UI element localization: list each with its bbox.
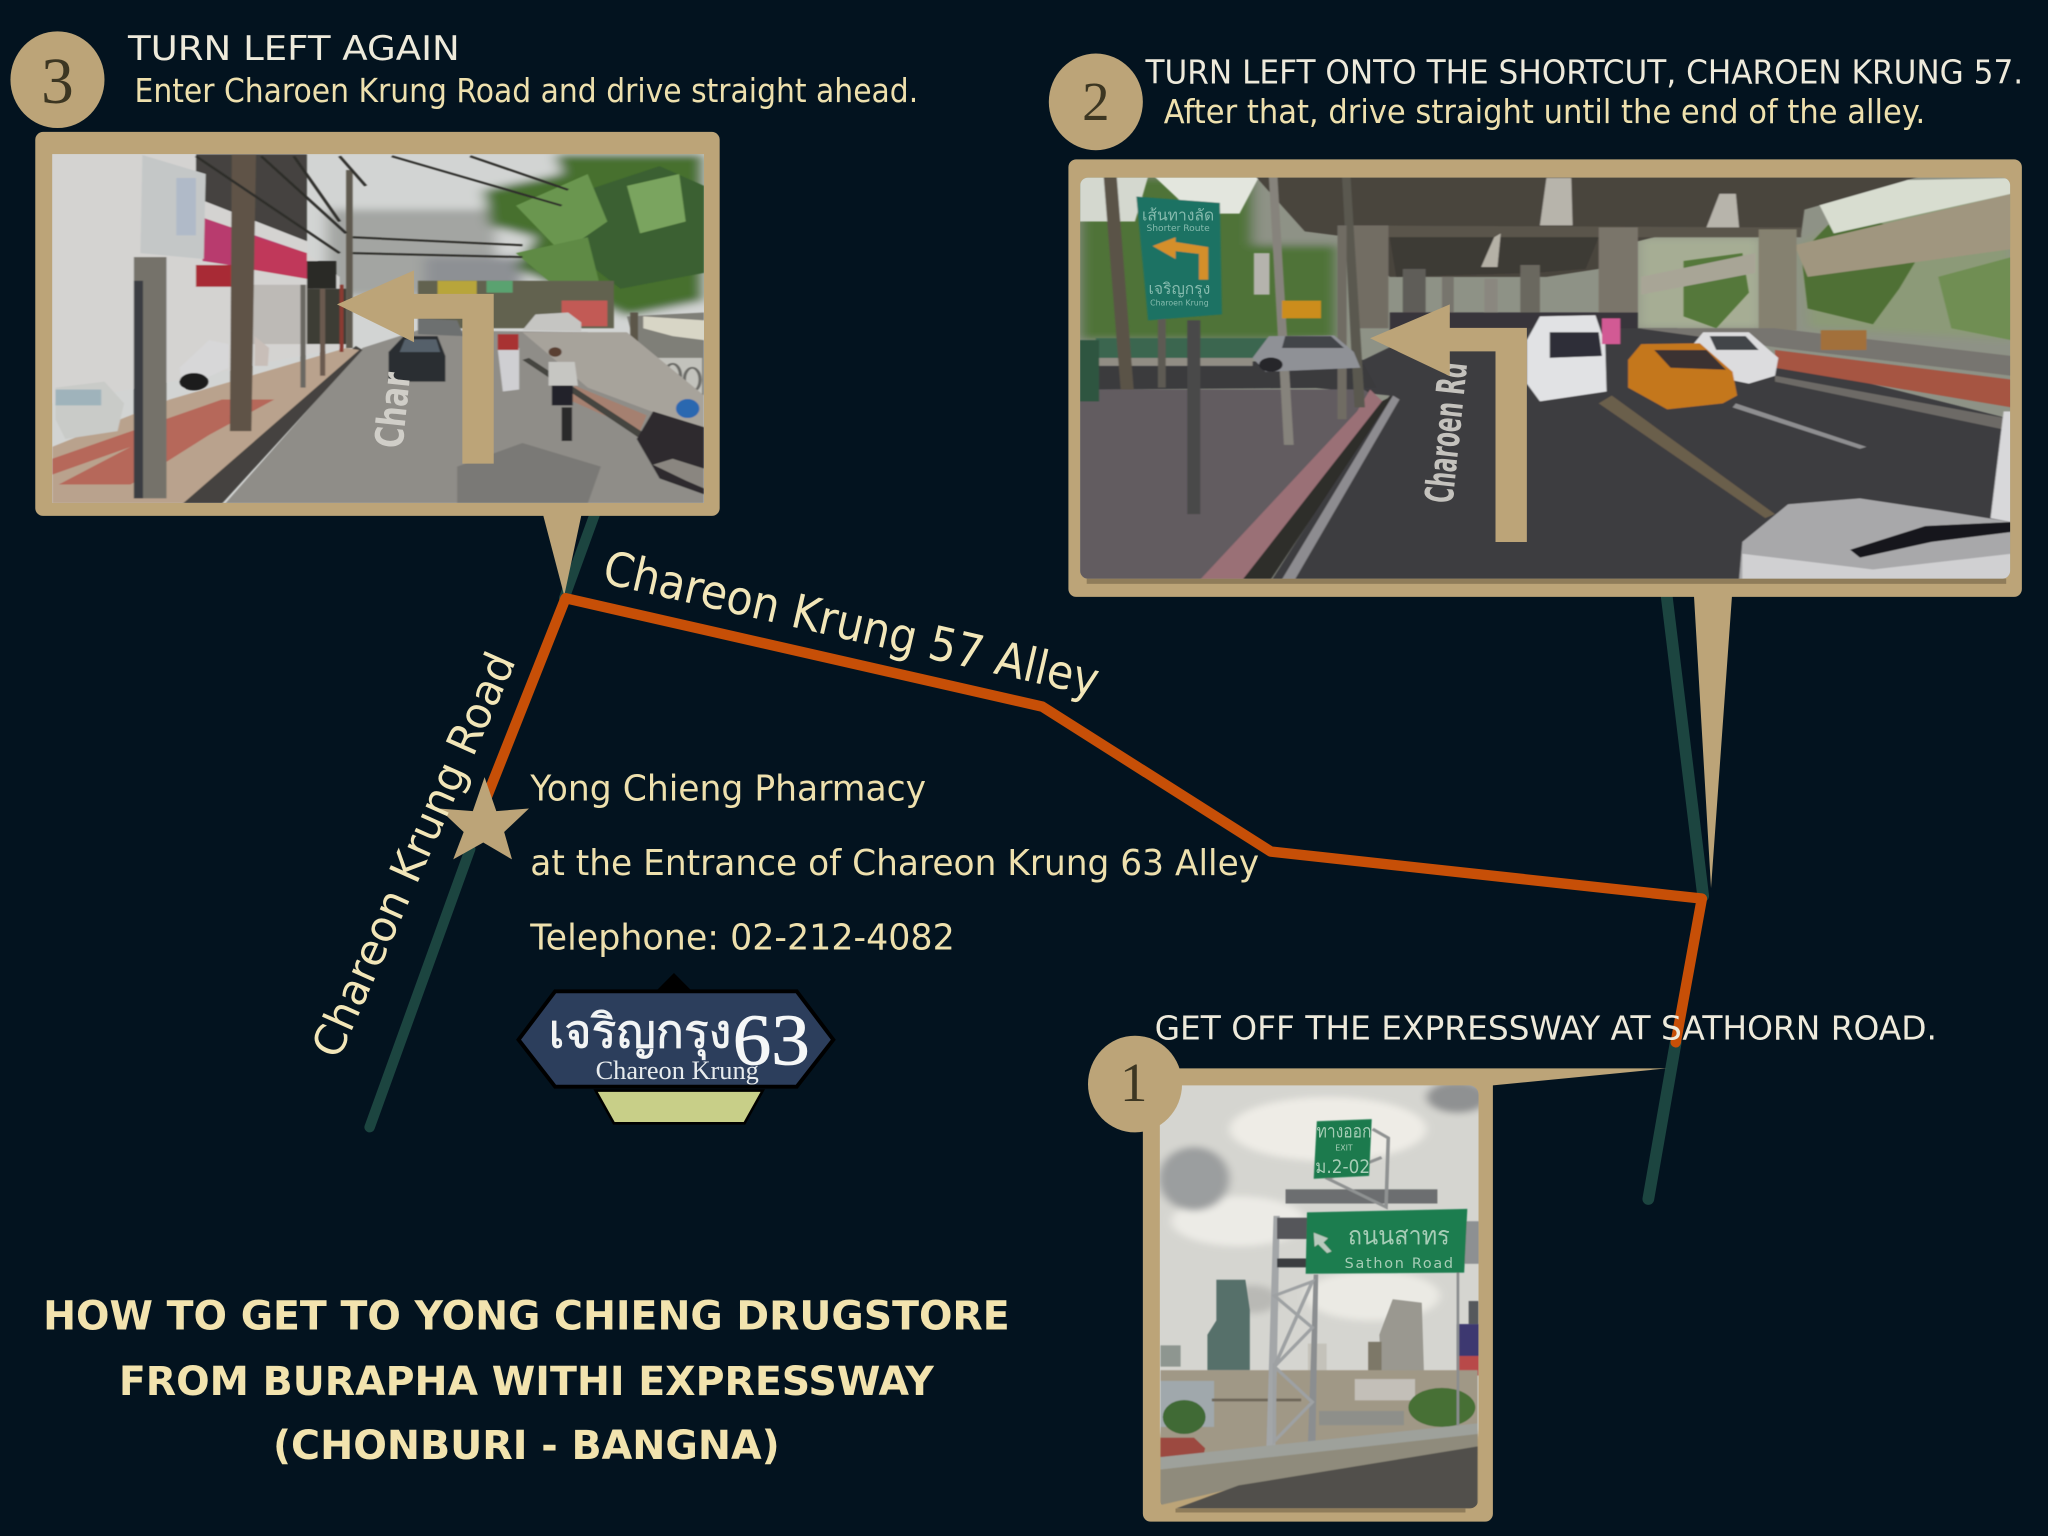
- text: destination details: Telephone: 02-212-4082: [529, 918, 955, 959]
- street foreground: [52, 154, 704, 503]
- arrow: turn left 2: [1370, 304, 1527, 542]
- under-bridge background: [1063, 166, 2030, 585]
- photo: under the expressway: [1063, 166, 2030, 585]
- sign text: เส้นทางลัด: [1142, 206, 1214, 225]
- text: step 2 description: After that, drive straight until the end of the alley.: [1164, 93, 1925, 131]
- panel: step 1: [1143, 1068, 1667, 1522]
- street sign: Charoen Krung 63: เจริญกรุง: [549, 1007, 731, 1061]
- street background: [39, 146, 718, 510]
- text: destination details: [529, 769, 1259, 959]
- sign text: EXIT: [1335, 1144, 1353, 1153]
- sign text: [1315, 1122, 1453, 1272]
- badge: step 3: 3: [41, 46, 74, 118]
- title: (CHONBURI - BANGNA): [273, 1421, 780, 1469]
- text: step 3 heading: TURN LEFT AGAIN: [127, 29, 460, 69]
- photo: Sathon Road exit sign: [1149, 1079, 1489, 1508]
- road marking text: Charoen Rd: [1418, 360, 1477, 505]
- title: HOW TO GET TO YONG CHIENG DRUGSTORE: [43, 1292, 1010, 1340]
- badge: step 2: [1049, 54, 1143, 150]
- sign text: ทางออก: [1317, 1122, 1371, 1143]
- badge: step 3: [10, 31, 104, 128]
- sky and clouds: [1149, 1079, 1489, 1434]
- badge: step 1: [1088, 1036, 1182, 1132]
- sign text: Sathon Road: [1345, 1256, 1453, 1272]
- road marking text: Char: [367, 370, 420, 450]
- sign text: เจริญกรุง: [1149, 279, 1210, 299]
- sign text: ม.2-02: [1315, 1157, 1370, 1178]
- road: Sathorn expressway: [1648, 596, 1703, 1199]
- text: step 1 heading: GET OFF THE EXPRESSWAY AT SATHORN ROAD.: [1155, 1010, 1937, 1048]
- under-bridge foreground: [1080, 177, 2011, 579]
- text: step 2 heading: TURN LEFT ONTO THE SHORTCUT, CHAROEN KRUNG 57.: [1145, 54, 2023, 92]
- photo: Charoen Krung street: [39, 146, 718, 510]
- panel: step 2: [1063, 159, 2030, 888]
- panel: step 3: [35, 132, 720, 596]
- street sign: Charoen Krung 63: [519, 973, 833, 1123]
- title: [43, 1292, 1010, 1469]
- label: Chareon Krung 57 Alley: Chareon Krung 57 Alley: [598, 541, 1104, 708]
- callout frame 2: [1068, 159, 2022, 888]
- sign text: Charoen Krung: [1150, 299, 1209, 308]
- street sign: Charoen Krung 63: 63: [733, 999, 810, 1080]
- arrow: turn left 3: [337, 270, 494, 464]
- label: Chareon Krung Road: Chareon Krung Road: [303, 645, 526, 1065]
- skyline and sign gantry: [1161, 1119, 1480, 1508]
- street sign: Charoen Krung 63: Chareon Krung: [596, 1056, 759, 1085]
- callout frame 1: [1143, 1068, 1667, 1522]
- badge: step 1: 1: [1120, 1052, 1147, 1113]
- road: Charoen Krung: [370, 512, 596, 1127]
- sign text: [1142, 206, 1214, 308]
- sign text: ถนนสาทร: [1348, 1222, 1450, 1252]
- text: step 3 description: Enter Charoen Krung Road and drive straight ahead.: [135, 72, 918, 110]
- icon: destination star: [439, 777, 529, 859]
- title: FROM BURAPHA WITHI EXPRESSWAY: [119, 1357, 935, 1405]
- text: destination details: at the Entrance of Chareon Krung 63 Alley: [530, 843, 1259, 884]
- route: orange driving path: [486, 598, 1702, 1042]
- callout frame 3: [35, 132, 720, 596]
- badge: step 2: 2: [1082, 71, 1110, 132]
- sign text: Shorter Route: [1146, 224, 1210, 234]
- text: destination details: Yong Chieng Pharmacy: [529, 769, 926, 810]
